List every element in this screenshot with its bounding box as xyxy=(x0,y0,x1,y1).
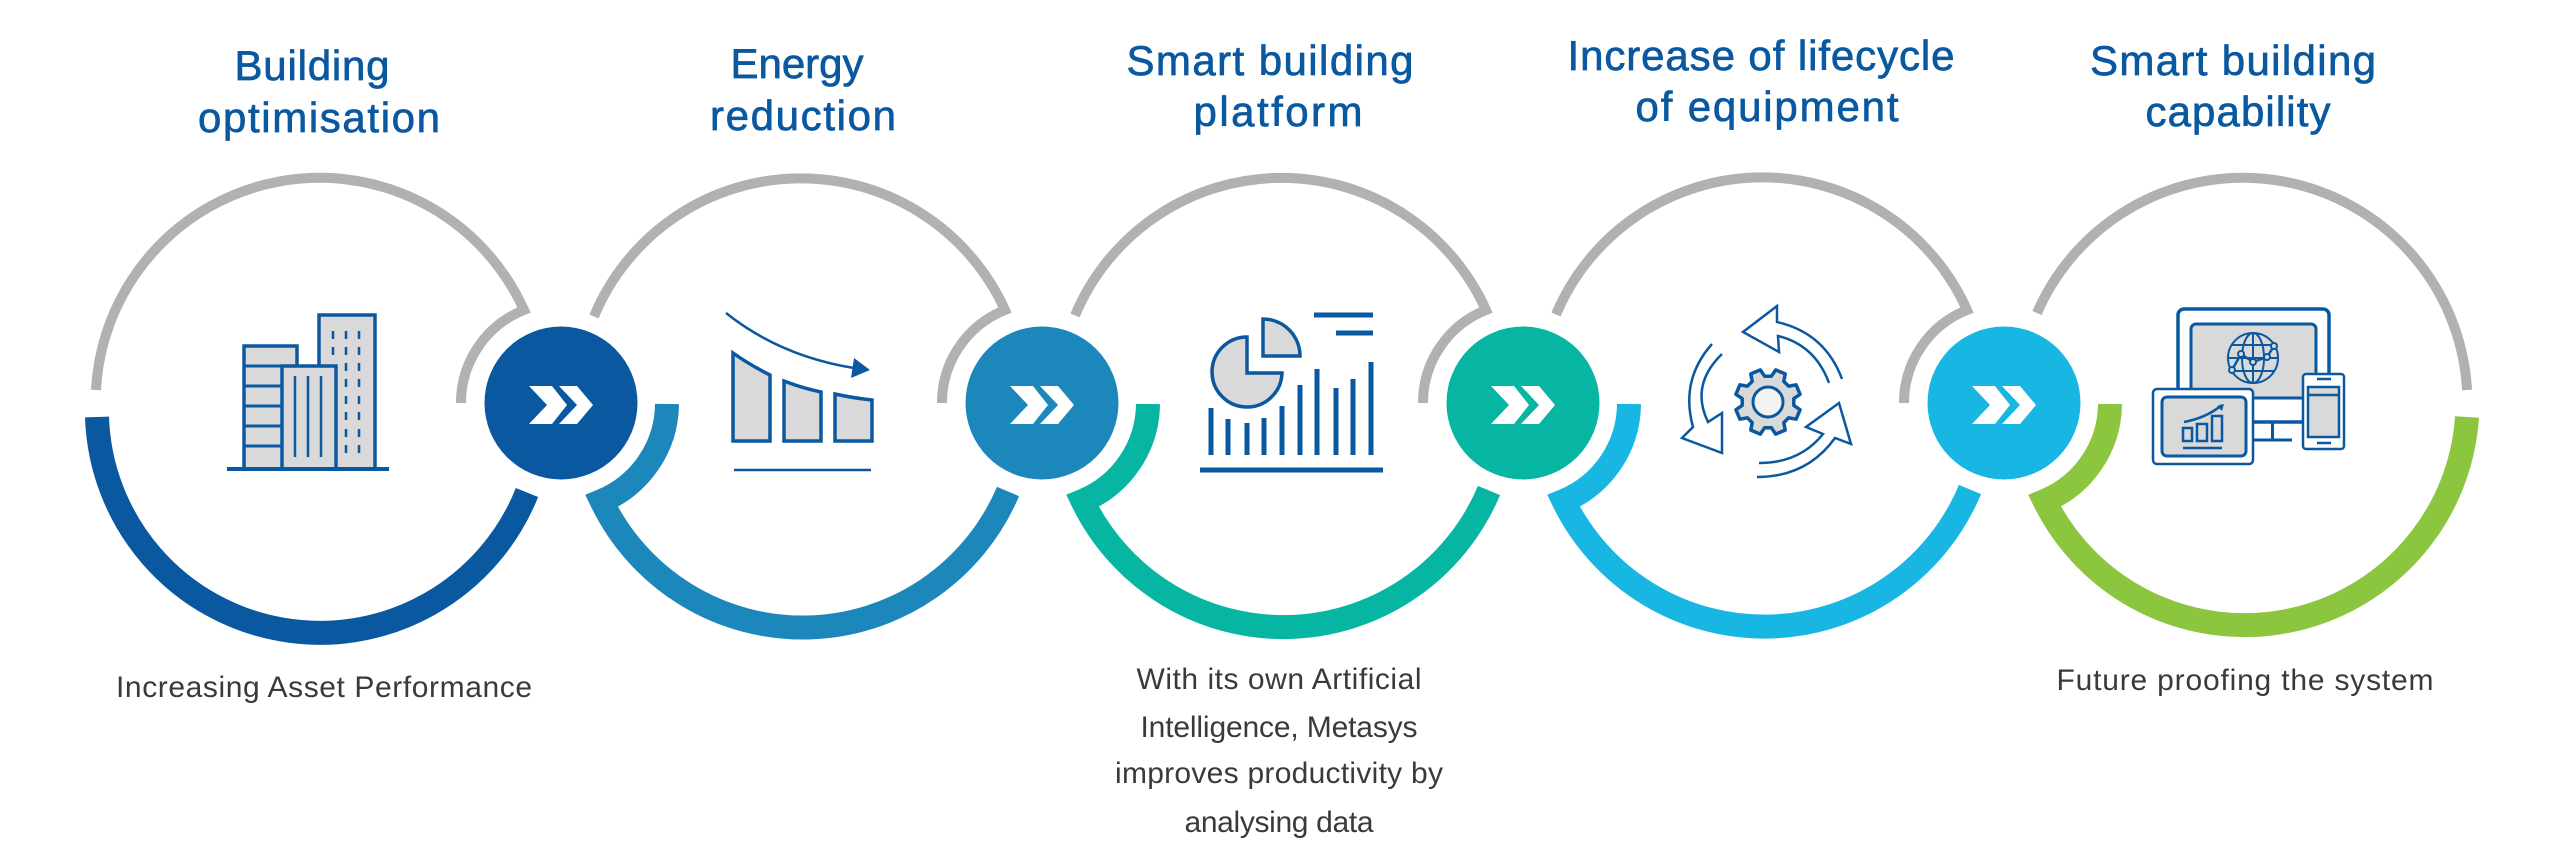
heading: energy reduction xyxy=(710,40,896,139)
heading: energy reduction: Energy xyxy=(730,40,864,87)
caption: metasys AI xyxy=(1115,663,1443,839)
icon: pie and bar chart xyxy=(1200,315,1383,470)
heading: smart building platform xyxy=(1126,37,1414,135)
caption: metasys AI: With its own Artificial xyxy=(1136,663,1422,696)
caption: metasys AI: improves productivity by xyxy=(1115,757,1443,790)
connector 4 xyxy=(1928,326,2080,480)
heading: increase of lifecycle of equipment xyxy=(1568,32,1954,130)
heading: smart building platform: platform xyxy=(1194,88,1362,135)
icon: gear with cycle arrows xyxy=(1682,306,1851,477)
heading: smart building platform: Smart building xyxy=(1126,37,1414,84)
teal lower arc 3 xyxy=(1083,404,1489,627)
panel: energy reduction xyxy=(594,40,1008,628)
heading: increase of lifecycle of equipment: Increase of lifecycle xyxy=(1568,32,1954,79)
green lower arc 5 xyxy=(2045,404,2467,625)
connector 3 xyxy=(1446,326,1600,480)
icon: buildings xyxy=(227,315,389,469)
grey upper arc 3 xyxy=(1075,178,1486,403)
caption: increasing asset performance: Increasing Asset Performance xyxy=(116,671,532,704)
mid-blue lower arc 2 xyxy=(602,404,1008,628)
connector 1 xyxy=(484,326,638,480)
heading: building optimisation xyxy=(198,42,440,141)
heading: smart building capability: Smart building xyxy=(2090,37,2376,84)
grey upper arc 1 xyxy=(96,178,524,403)
icon: connected devices xyxy=(2153,309,2344,464)
caption: metasys AI: analysing data xyxy=(1184,806,1374,839)
heading: building optimisation: optimisation xyxy=(198,94,440,141)
blue lower arc 1 xyxy=(97,417,527,633)
connector 2 xyxy=(966,326,1118,480)
heading: energy reduction: reduction xyxy=(710,92,896,139)
heading: smart building capability xyxy=(2090,37,2376,135)
panel: smart building capability xyxy=(2037,37,2467,697)
grey upper arc 2 xyxy=(594,178,1005,403)
panel: lifecycle xyxy=(1556,32,1970,627)
heading: increase of lifecycle of equipment: of equipment xyxy=(1636,83,1899,130)
heading: smart building capability: capability xyxy=(2146,88,2330,135)
panel: smart building platform xyxy=(1075,37,1489,839)
icon: declining bars xyxy=(726,313,872,470)
cyan lower arc 4 xyxy=(1564,404,1970,627)
grey upper arc 5 xyxy=(2037,178,2467,390)
panel: building optimisation xyxy=(96,42,532,704)
caption: metasys AI: Intelligence, Metasys xyxy=(1140,711,1418,744)
grey upper arc 4 xyxy=(1556,177,1967,403)
heading: building optimisation: Building xyxy=(234,42,390,89)
caption: future proofing: Future proofing the system xyxy=(2056,664,2434,697)
